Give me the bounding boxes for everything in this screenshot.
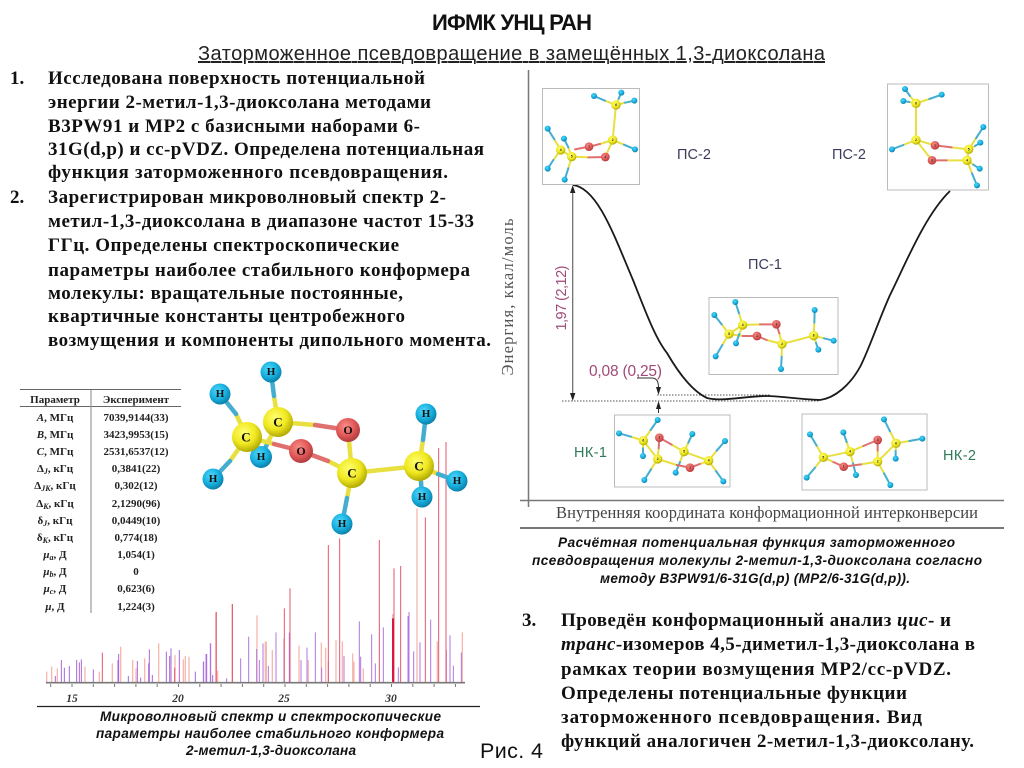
text block: items 1 and 2: энергии 2-метил-1,3-диоксолана методами [48, 92, 431, 113]
panel: PS-1: 3 [775, 322, 777, 326]
table: spectroscopic parameters: 0,774(18) [114, 532, 158, 544]
table: spectroscopic parameters: c [50, 587, 54, 596]
panel: PS-2 left: 4 [560, 148, 562, 152]
table: spectroscopic parameters: μ [42, 566, 50, 578]
label: PS-2 left: ПС-2 [677, 147, 711, 163]
panel: PS-2 right: 5 [968, 147, 970, 151]
panel: NK-2: 4 [849, 450, 851, 454]
text block: item 3: заторможенного псевдовращения. Вид [561, 707, 922, 728]
panel: NK-2: 5 [822, 455, 824, 459]
label: NK-1: НК-1 [574, 445, 607, 461]
panel: PS-1 [709, 298, 838, 374]
caption: potential function [532, 535, 982, 586]
table: spectroscopic parameters: 0 [133, 566, 139, 578]
panel: PS-1: 2 [781, 342, 783, 346]
panel: PS-2 left: 6 [615, 103, 617, 107]
panel: PS-2 left: 2 [612, 138, 614, 142]
table: spectroscopic parameters: Δ [34, 480, 41, 492]
table: spectroscopic parameters: 2531,6537(12) [103, 446, 169, 458]
molecule: 2-methyl-1,3-dioxolane 3D model: C [241, 430, 251, 444]
caption: potential function: псевдовращения молекулы 2-метил-1,3-диоксолана согласно [532, 553, 982, 568]
caption: spectrum [37, 706, 480, 758]
text block: items 1 and 2: метил-1,3-диоксолана в диапазоне частот 15-33 [48, 211, 474, 232]
caption: spectrum: Микроволновый спектр и спектроскопические [100, 709, 441, 724]
table: spectroscopic parameters: C, МГц [37, 446, 74, 458]
text block: items 1 and 2 [10, 68, 491, 351]
caption: potential function: методу B3PW91/6-31G(d,p) (MP2/6-31G(d,p)). [600, 571, 910, 586]
panel: PS-2 left: 3 [604, 155, 606, 159]
molecule: 2-methyl-1,3-dioxolane 3D model: H [418, 491, 427, 503]
table: spectroscopic parameters: B, МГц [36, 429, 74, 441]
table: spectroscopic parameters: Параметр [30, 394, 80, 406]
table: spectroscopic parameters: 1,224(3) [117, 601, 155, 613]
text block: item 3: функций аналогичен 2-метил-1,3-диоксолану. [561, 731, 974, 752]
table: spectroscopic parameters: , кГц [48, 463, 74, 475]
table: spectroscopic parameters: JK [40, 484, 51, 493]
table: spectroscopic parameters: , кГц [51, 480, 76, 492]
chart: microwave spectrum: 25 [277, 693, 290, 705]
panel: NK-2: 2 [877, 460, 879, 464]
panel: NK-1 [614, 415, 730, 487]
chart: microwave spectrum: 15 [66, 693, 78, 705]
text block: items 1 and 2: 1. [10, 68, 24, 89]
table: spectroscopic parameters: δ [38, 515, 43, 527]
table: spectroscopic parameters: 2,1290(96) [112, 498, 161, 510]
arrow: barrier 1.97 [570, 185, 575, 401]
molecule: 2-methyl-1,3-dioxolane 3D model: C [273, 414, 283, 430]
chart: microwave spectrum: 20 [171, 693, 184, 705]
text block: item 3: рамках теории возмущения MP2/cc-pVDZ. [561, 659, 951, 680]
panel: NK-2 [802, 414, 927, 490]
table: spectroscopic parameters [20, 390, 181, 613]
reference levels [562, 400, 820, 402]
molecule: 2-methyl-1,3-dioxolane 3D model: H [267, 366, 276, 378]
chart: microwave spectrum [46, 442, 465, 705]
table: spectroscopic parameters: 7039,9144(33) [103, 412, 169, 424]
panel: NK-2: 6 [895, 441, 897, 445]
molecule: 2-methyl-1,3-dioxolane 3D model: H [257, 451, 266, 463]
label: PS-2 right: ПС-2 [832, 147, 866, 163]
table: spectroscopic parameters: , Д [54, 549, 67, 561]
table: spectroscopic parameters: 0,623(6) [117, 583, 155, 595]
table: spectroscopic parameters: μ [43, 583, 50, 595]
panel: PS-2 right: 2 [915, 138, 917, 142]
figure number: Рис. 4 [480, 739, 543, 763]
panel: PS-1: 5 [728, 332, 730, 336]
table: spectroscopic parameters: 0,0449(10) [112, 515, 161, 527]
table: spectroscopic parameters: μ [42, 549, 50, 561]
x axis label: Внутренняя координата конформационной интерконверсии [556, 503, 978, 522]
panel: PS-2 right: 4 [966, 158, 968, 162]
table: spectroscopic parameters: J [42, 519, 48, 528]
text block: item 3: Проведён конформационный анализ цис- и [561, 610, 951, 631]
text block: items 1 and 2: ГГц. Определены спектроскопические [48, 235, 399, 256]
panel: NK-1: 6 [642, 439, 644, 443]
molecule: 2-methyl-1,3-dioxolane 3D model: H [216, 388, 225, 400]
panel: NK-2: 3 [877, 438, 879, 442]
table: spectroscopic parameters: δ [37, 532, 43, 544]
text block: item 3 [522, 610, 975, 752]
molecule: 2-methyl-1,3-dioxolane 3D model: C [414, 458, 424, 474]
panel: PS-2 right: 3 [931, 158, 933, 162]
table: spectroscopic parameters: 0,302(12) [114, 480, 158, 492]
text block: item 3: Определены потенциальные функции [561, 683, 907, 704]
table: spectroscopic parameters: , кГц [49, 498, 74, 510]
text block: items 1 and 2: Исследована поверхность потенциальной [48, 68, 425, 89]
panel: NK-1: 3 [658, 436, 660, 440]
table: spectroscopic parameters: 1,054(1) [117, 549, 155, 561]
table: spectroscopic parameters: 0,3841(22) [112, 463, 161, 475]
table: spectroscopic parameters: , кГц [47, 515, 73, 527]
text block: items 1 and 2: возмущения и компоненты дипольного момента. [48, 330, 491, 351]
text block: items 1 and 2: молекулы: вращательные постоянные, [48, 283, 403, 304]
text block: items 1 and 2: Зарегистрирован микроволновый спектр 2- [48, 187, 446, 208]
panel: NK-1: 4 [708, 459, 710, 463]
chart: potential energy function [498, 70, 1004, 528]
arrow: barrier 0.08 [637, 378, 661, 413]
text block: items 1 and 2: параметры наиболее стабильного конформера [48, 260, 470, 281]
molecule: 2-methyl-1,3-dioxolane 3D model: O [296, 444, 306, 458]
panel: PS-1: 6 [813, 334, 815, 338]
panel: PS-2 right: 6 [915, 101, 917, 105]
text block: items 1 and 2: квартичные константы центробежного [48, 306, 405, 327]
table: spectroscopic parameters: 3423,9953(15) [103, 429, 169, 441]
molecule: 2-methyl-1,3-dioxolane 3D model: O [343, 423, 353, 437]
label: small barrier value: 0,08 (0,25) [589, 363, 662, 380]
table: spectroscopic parameters: Эксперимент [103, 394, 170, 406]
molecule: 2-methyl-1,3-dioxolane 3D model: C [347, 466, 357, 480]
panel: NK-2: 1 [843, 465, 845, 469]
chart: microwave spectrum: 30 [384, 693, 397, 705]
molecule: 2-methyl-1,3-dioxolane 3D model: H [338, 518, 347, 530]
subtitle: Заторможенное псевдовращение в замещённых 1,3-диоксолана [198, 43, 826, 65]
text block: items 1 and 2: функция заторможенного псевдовращения. [48, 162, 448, 183]
table: spectroscopic parameters: K [42, 502, 49, 511]
panel: PS-1: 1 [756, 334, 758, 338]
table: spectroscopic parameters: K [42, 536, 49, 545]
panel: NK-1: 5 [683, 450, 685, 454]
label: barrier value: 1,97 (2,12) [554, 266, 570, 330]
caption: spectrum: параметры наиболее стабильного конформера [96, 726, 444, 741]
panel: PS-2 right [888, 84, 988, 190]
panel: PS-2 left [542, 88, 640, 184]
text block: items 1 and 2: 2. [10, 187, 24, 208]
molecule: 2-methyl-1,3-dioxolane 3D model: H [422, 408, 431, 420]
title: ИФМК УНЦ РАН [432, 10, 592, 35]
table: spectroscopic parameters: Δ [36, 498, 43, 510]
text block: item 3: транс-изомеров 4,5-диметил-1,3-диоксолана в [561, 634, 975, 655]
table: spectroscopic parameters: , Д [53, 583, 67, 595]
table: spectroscopic parameters: , Д [54, 566, 67, 578]
table: spectroscopic parameters: b [50, 570, 54, 579]
molecule: 2-methyl-1,3-dioxolane 3D model: H [209, 473, 218, 485]
caption: potential function: Расчётная потенциальная функция заторможенного [558, 535, 955, 550]
panel: PS-2 left: 1 [588, 145, 590, 149]
energy curve [573, 185, 950, 400]
text block: items 1 and 2: B3PW91 и MP2 с базисными наборами 6- [48, 116, 420, 137]
table: spectroscopic parameters: Δ [37, 463, 44, 475]
text block: item 3: 3. [522, 610, 536, 631]
panel: PS-1: 4 [742, 323, 744, 327]
text block: items 1 and 2: 31G(d,p) и cc-pVDZ. Определена потенциальная [48, 139, 484, 160]
panel: PS-2 left: 5 [571, 155, 573, 159]
molecule: 2-methyl-1,3-dioxolane 3D model [202, 362, 468, 534]
table: spectroscopic parameters: μ, Д [44, 601, 65, 613]
table: spectroscopic parameters: a [50, 553, 54, 562]
y axis label: Энергия, ккал/моль [498, 218, 517, 376]
table: spectroscopic parameters: , кГц [48, 532, 74, 544]
table: spectroscopic parameters: J [43, 467, 49, 476]
panel: PS-2 right: 1 [934, 143, 936, 147]
table: spectroscopic parameters: A, МГц [36, 412, 74, 424]
caption: spectrum: 2-метил-1,3-диоксолана [185, 743, 356, 758]
molecule: 2-methyl-1,3-dioxolane 3D model: H [453, 475, 462, 487]
label: PS-1: ПС-1 [748, 257, 782, 273]
label: NK-2: НК-2 [943, 448, 976, 464]
panel: NK-1: 2 [657, 457, 659, 461]
panel: NK-1: 1 [689, 466, 691, 470]
